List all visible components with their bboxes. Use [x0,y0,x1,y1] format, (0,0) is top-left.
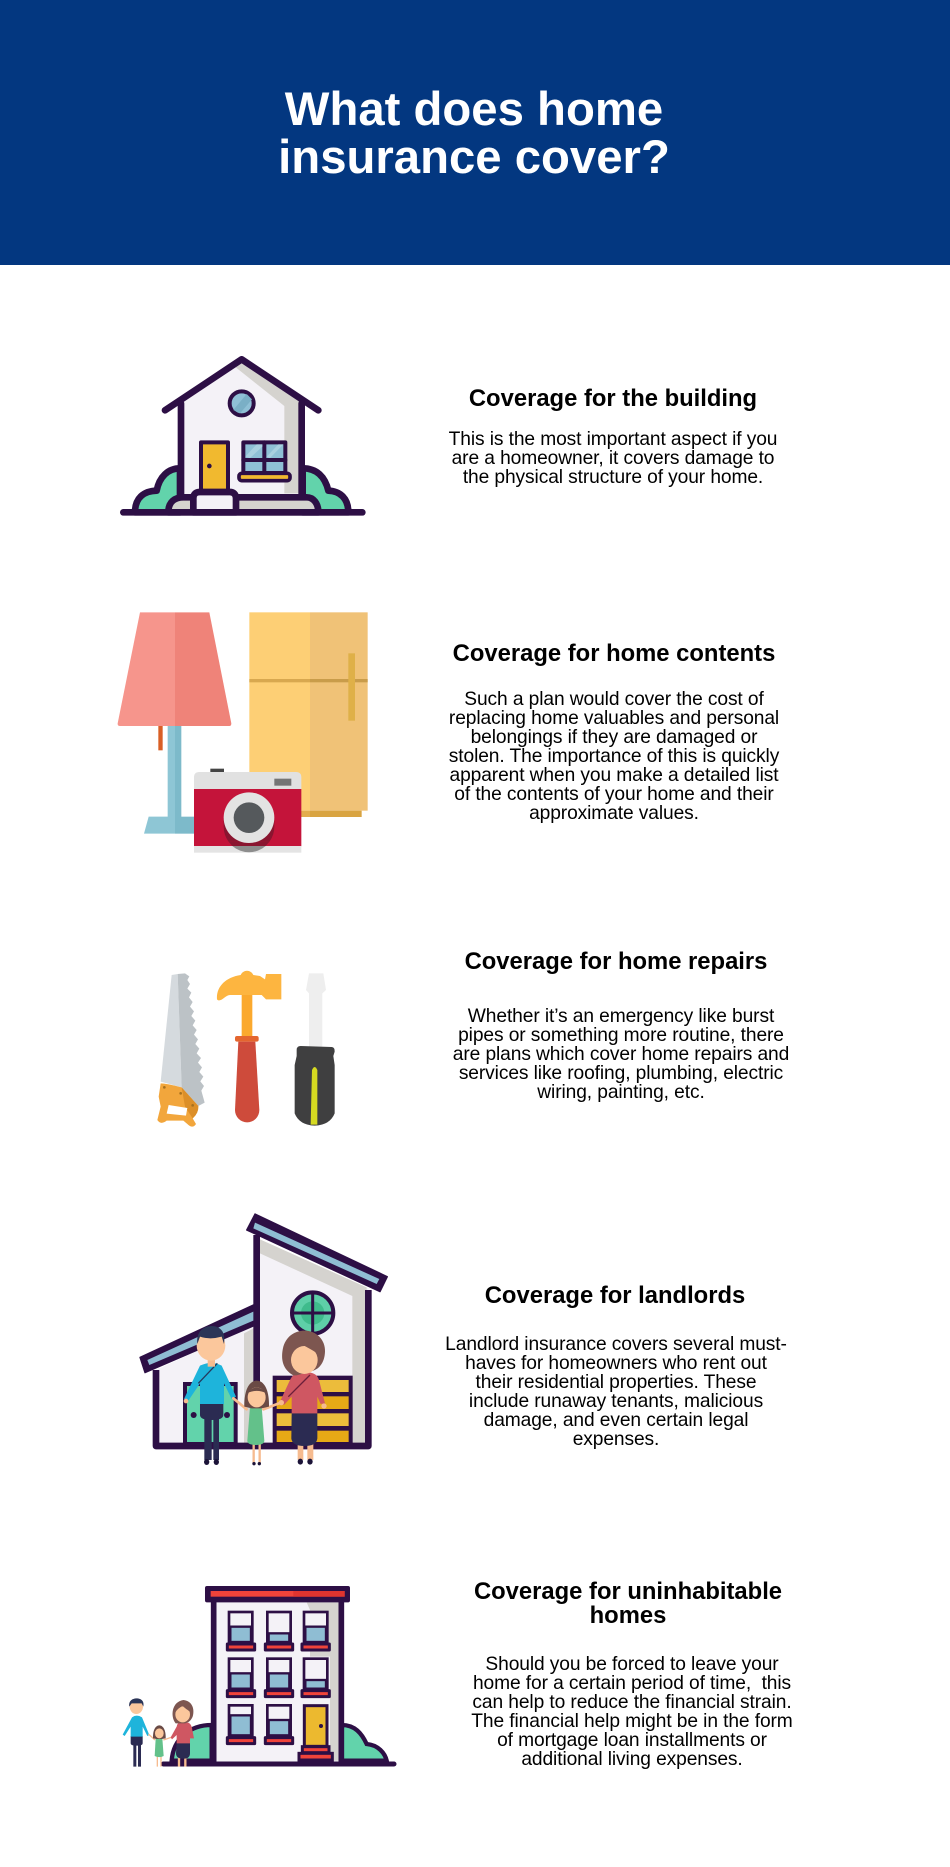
window sills [227,1644,329,1744]
fridge [249,612,368,817]
text block: home for a certain period of time, this [473,1673,791,1694]
text block: the physical structure of your home. [463,467,763,488]
hammer [217,971,281,1122]
family [123,1698,194,1767]
lamp [118,612,231,834]
text block: include runaway tenants, malicious [469,1391,763,1412]
man [184,1326,236,1465]
icon: apartment building and family [123,1586,394,1767]
girl [233,1381,283,1465]
roof [205,1586,350,1602]
text block: of the contents of your home and their [454,784,774,805]
title: insurance cover? [278,130,670,184]
garage door [185,1384,236,1444]
text block: wiring, painting, etc. [537,1082,705,1103]
text block: Whether it’s an emergency like burst [468,1006,774,1027]
title: What does home [285,83,663,136]
text block: pipes or something more routine, there [458,1025,784,1046]
panel: coverage for home contents [449,640,780,824]
text block: expenses. [573,1429,659,1450]
panel: coverage for landlords [445,1282,787,1450]
heading: Coverage for uninhabitable [474,1578,782,1605]
text block: are plans which cover home repairs and [453,1044,789,1065]
header banner [0,0,950,265]
text block: additional living expenses. [521,1749,743,1770]
heading: Coverage for the building [469,385,757,412]
panel: coverage for home repairs [453,948,789,1103]
text block: their residential properties. These [476,1372,756,1393]
windows [229,1612,327,1736]
slatted door [273,1376,353,1444]
icon: family in front of modern house [140,1214,387,1465]
saw [157,973,205,1127]
camera [194,769,301,853]
heading: Coverage for home repairs [465,948,767,975]
panel: coverage for the building [449,385,777,488]
woman [279,1331,327,1465]
text block: Landlord insurance covers several must- [445,1334,787,1355]
title [278,83,670,184]
icon: lamp, fridge and camera [118,612,368,853]
text block [449,429,777,488]
text block [445,1334,787,1450]
door and steps [299,1706,332,1760]
text block: replacing home valuables and personal [449,708,779,729]
text block: apparent when you make a detailed list [450,765,778,786]
text block: damage, and even certain legal [484,1410,748,1431]
text block [453,1006,789,1103]
icon: saw, hammer and screwdriver [157,971,335,1127]
text block: Should you be forced to leave your [485,1654,779,1675]
text block: stolen. The importance of this is quickly [449,746,779,767]
icon: house [123,359,362,512]
text block: This is the most important aspect if you [449,429,777,450]
round window [292,1292,333,1334]
text block [471,1654,793,1770]
heading: Coverage for home contents [453,640,775,667]
text block: services like roofing, plumbing, electric [459,1063,783,1084]
text block: of mortgage loan installments or [497,1730,767,1751]
screwdriver [295,973,335,1126]
text block: are a homeowner, it covers damage to [452,448,774,469]
heading [474,1578,782,1629]
heading: homes [590,1602,666,1629]
panel: coverage for uninhabitable homes [471,1578,793,1770]
text block: belongings if they are damaged or [471,727,757,748]
text block: haves for homeowners who rent out [465,1353,767,1374]
text block: Such a plan would cover the cost of [464,689,764,710]
text block: approximate values. [529,803,699,824]
heading: Coverage for landlords [485,1282,745,1309]
text block: The financial help might be in the form [471,1711,793,1732]
text block: can help to reduce the financial strain. [472,1692,792,1713]
text block [449,689,780,824]
